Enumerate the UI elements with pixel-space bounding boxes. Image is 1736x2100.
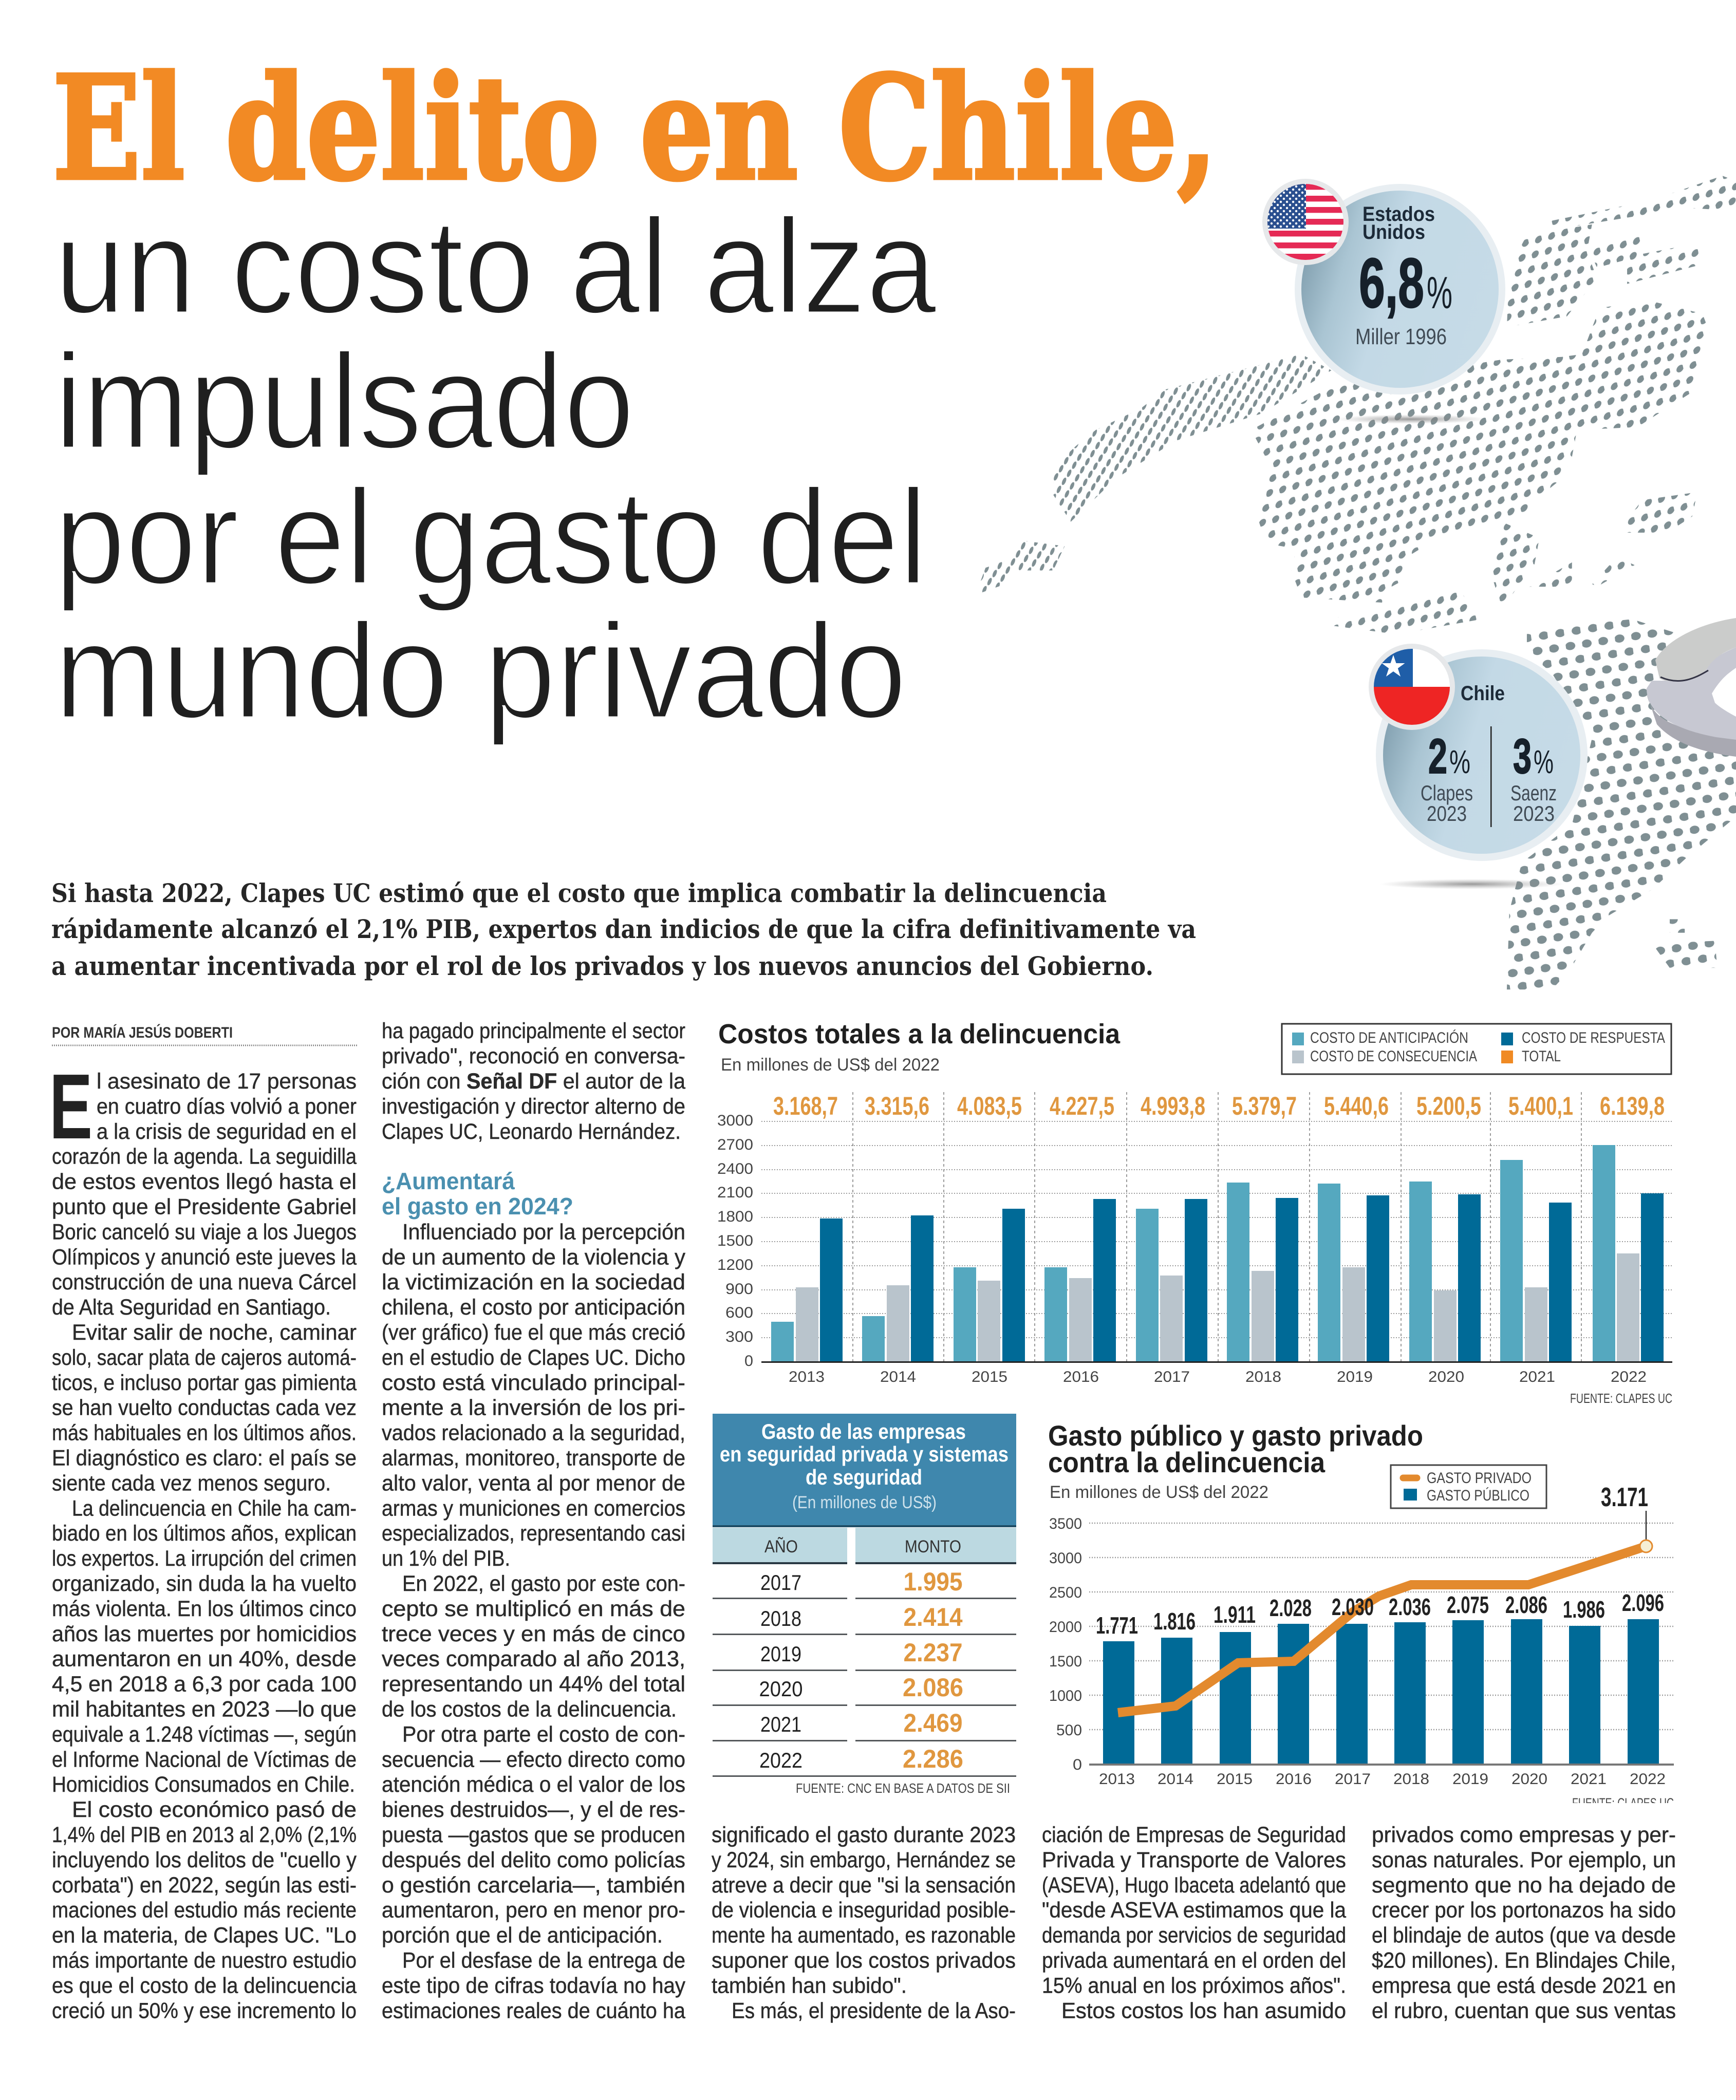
article column 3: y 2024, sin embargo, Hernández se	[712, 1848, 1016, 1872]
value: 3% Saenz 2023: %	[1534, 743, 1554, 780]
article column 2	[382, 1019, 685, 2023]
x axis years: 2013	[1099, 1771, 1135, 1788]
table rows: 2020	[759, 1677, 802, 1701]
column text: alto valor, venta al por menor de	[382, 1471, 685, 1495]
column text: o gestión carcelaria—, también	[382, 1873, 685, 1898]
bar value labels: 2.096	[1622, 1589, 1664, 1616]
table rows: 2019	[760, 1642, 801, 1666]
y axis labels: 0	[744, 1353, 753, 1370]
x axis years: 2017	[1335, 1771, 1371, 1788]
source: FUENTE: CLAPES UC	[1570, 1391, 1672, 1406]
bar value labels	[1096, 1589, 1664, 1639]
paragraph continuation: ha pagado principalmente el sector	[382, 1019, 685, 1043]
x axis years: 2022	[1611, 1368, 1647, 1385]
article column 5: sonas naturales. Por ejemplo, un	[1372, 1848, 1676, 1872]
column text: en cuatro días volvió a poner	[97, 1094, 357, 1119]
column text: aumentaron, pero en menor pro-	[382, 1898, 685, 1923]
paragraph continuation: Clapes UC, Leonardo Hernández.	[382, 1119, 681, 1144]
x axis years: 2015	[972, 1368, 1007, 1385]
total values: 5.440,6	[1324, 1092, 1389, 1120]
column text: de Alta Seguridad en Santiago.	[52, 1295, 331, 1320]
bar value labels: 2.028	[1270, 1595, 1312, 1621]
table rows: 2.237	[903, 1638, 963, 1667]
column text: Evitar salir de noche, caminar	[72, 1320, 357, 1345]
table rows: 2.414	[903, 1603, 963, 1632]
article column 4: 15% anual en los próximos años".	[1042, 1973, 1346, 1998]
table header	[713, 1414, 1016, 1527]
total values	[773, 1092, 1665, 1120]
byline: POR MARÍA JESÚS DOBERTI	[52, 1024, 233, 1041]
column text: chilena, el costo por anticipación	[382, 1295, 685, 1320]
column text: a la crisis de seguridad en el	[97, 1119, 357, 1144]
column text: l asesinato de 17 personas	[97, 1069, 357, 1094]
value: 6,8%: %	[1427, 267, 1452, 318]
y axis labels	[1049, 1515, 1082, 1773]
drop cap: E	[49, 1055, 92, 1158]
column text: El costo económico pasó de	[72, 1797, 357, 1822]
bubble shadow	[1334, 415, 1488, 424]
column text: En 2022, el gasto por este con-	[402, 1571, 685, 1596]
column text: 4,5 en 2018 a 6,3 por cada 100	[52, 1672, 357, 1697]
x axis years: 2019	[1337, 1368, 1373, 1385]
article column 4: privada aumentará en el orden del	[1042, 1948, 1346, 1973]
y axis labels: 2700	[717, 1136, 753, 1153]
x axis years: 2013	[789, 1368, 825, 1385]
article column 3: atreve a decir que "si la sensación	[712, 1873, 1016, 1898]
x axis years: 2017	[1154, 1368, 1190, 1385]
column text: es que el costo de la delincuencia	[52, 1973, 357, 1998]
column text: armas y municiones en comercios	[382, 1496, 685, 1521]
dotted world map	[976, 176, 1736, 989]
chart heading: Costos totales a la delincuencia	[718, 1019, 1121, 1049]
y axis labels: 1000	[1049, 1688, 1082, 1704]
y axis labels: 900	[725, 1281, 753, 1298]
chart heading: En millones de US$ del 2022	[1050, 1483, 1268, 1502]
y axis labels	[717, 1112, 753, 1370]
column text: los expertos. La irrupción del crimen	[52, 1546, 357, 1571]
column text: se han vuelto conductas cada vez	[52, 1396, 357, 1420]
bar value labels: 1.911	[1214, 1601, 1256, 1628]
map: south america	[1507, 619, 1736, 989]
column text: solo, sacar plata de cajeros automá-	[52, 1345, 357, 1370]
column text: representando un 44% del total	[382, 1672, 685, 1697]
chart heading: contra la delincuencia	[1048, 1446, 1326, 1478]
paragraph continuation: privado", reconoció en conversa-	[382, 1044, 685, 1068]
paragraph continuation: ción con Señal DF el autor de la	[382, 1069, 685, 1094]
value: 2% Clapes 2023: Clapes	[1421, 781, 1473, 805]
column text: secuencia — efecto directo como	[382, 1747, 685, 1772]
article column 3: también han subido".	[712, 1973, 907, 1998]
y axis labels: 2500	[1049, 1584, 1082, 1601]
value: 6,8%: 6,8	[1359, 244, 1424, 323]
total values: 5.200,5	[1416, 1092, 1481, 1120]
article column 3: Es más, el presidente de la Aso-	[732, 1998, 1016, 2023]
table header: de seguridad	[806, 1465, 922, 1489]
table rows: 1.995	[903, 1567, 963, 1596]
column text: la victimización en la sociedad	[382, 1270, 685, 1295]
table rows: 2.086	[903, 1673, 963, 1702]
article column 4: "desde ASEVA estimamos que la	[1042, 1898, 1346, 1923]
article column 4	[1042, 1823, 1346, 2023]
article column 4: Privada y Transporte de Valores	[1042, 1848, 1346, 1872]
map: main land mass	[1251, 300, 1710, 603]
title: dark lines: por el gasto del	[54, 461, 927, 613]
callout: Estados Unidos bubble	[1262, 179, 1505, 424]
column text: construcción de una nueva Cárcel	[52, 1270, 357, 1295]
column text: punto que el Presidente Gabriel	[52, 1195, 357, 1220]
paragraph continuation	[382, 1019, 685, 1144]
table header: en seguridad privada y sistemas	[720, 1442, 1009, 1466]
x axis years: 2016	[1063, 1368, 1099, 1385]
column text: alarmas, monitoreo, transporte de	[382, 1446, 685, 1470]
title: dark lines: impulsado	[54, 326, 634, 478]
value: 3% Saenz 2023: Saenz	[1510, 781, 1557, 805]
article column 3: significado el gasto durante 2023	[712, 1823, 1016, 1847]
bars: consecuencia	[796, 1253, 1639, 1362]
standfirst: rápidamente alcanzó el 2,1% PIB, expertos dan indicios de que la cifra definitivamente va	[51, 914, 1196, 944]
total values: 4.083,5	[957, 1092, 1022, 1120]
column text: vados relacionado a la seguridad,	[382, 1421, 685, 1446]
column headers	[713, 1528, 1016, 1564]
label: Estados Unidos	[1362, 203, 1435, 243]
standfirst: a aumentar incentivada por el rol de los privados y los nuevos anuncios del Gobierno.	[51, 951, 1153, 981]
source: Miller 1996: Miller 1996	[1355, 324, 1447, 349]
title: orange line: El delito en Chile,	[52, 44, 1218, 212]
article column 5	[1372, 1823, 1676, 2023]
legend: COSTO DE CONSECUENCIA	[1310, 1048, 1477, 1065]
article column 1	[49, 1055, 357, 2023]
column headers: MONTO	[905, 1537, 961, 1557]
map: southern islands	[1652, 919, 1718, 968]
subheading: el gasto en 2024?	[382, 1193, 573, 1220]
column text: trece veces y en más de cinco	[382, 1622, 685, 1646]
article column 3: de violencia e inseguridad posible-	[712, 1898, 1016, 1923]
legend	[1391, 1465, 1546, 1508]
total values: 4.227,5	[1050, 1092, 1114, 1120]
callout: Chile bubble	[1369, 644, 1588, 889]
column text: siente cada vez menos seguro.	[52, 1471, 331, 1495]
bar value labels: 1.986	[1563, 1596, 1605, 1623]
legend: TOTAL	[1522, 1048, 1561, 1065]
subheading	[382, 1168, 573, 1220]
article column 5: el rubro, cuentan que sus ventas	[1372, 1998, 1676, 2023]
column text: el Informe Nacional de Víctimas de	[52, 1747, 357, 1772]
x axis years: 2019	[1452, 1771, 1488, 1788]
total values: 3.168,7	[773, 1092, 838, 1120]
bubble disc	[1376, 649, 1588, 861]
column text: porción que el de anticipación.	[382, 1923, 663, 1948]
column text: 1,4% del PIB en 2013 al 2,0% (2,1%	[52, 1823, 357, 1847]
y axis labels: 0	[1073, 1756, 1082, 1773]
column text	[382, 1220, 685, 2023]
article column 5: el blindaje de autos (que va desde	[1372, 1923, 1676, 1948]
value: 2% Clapes 2023: 2023	[1427, 801, 1467, 826]
label: Chile: Chile	[1461, 682, 1505, 705]
y axis labels: 500	[1056, 1722, 1082, 1739]
chart heading: En millones de US$ del 2022	[721, 1055, 940, 1075]
legend: COSTO DE ANTICIPACIÓN	[1310, 1029, 1468, 1046]
column text: Por el desfase de la entrega de	[402, 1948, 685, 1973]
callout: 3.171	[1601, 1483, 1652, 1552]
column text: un 1% del PIB.	[382, 1546, 510, 1571]
subheading: ¿Aumentará	[382, 1168, 515, 1194]
column text: El diagnóstico es claro: el país se	[52, 1446, 357, 1470]
x axis years	[789, 1368, 1647, 1385]
x axis years: 2016	[1276, 1771, 1312, 1788]
y axis labels: 1500	[717, 1232, 753, 1249]
bar value labels: 2.086	[1505, 1591, 1547, 1618]
article column 4: Estos costos los han asumido	[1061, 1998, 1346, 2023]
divider	[1490, 726, 1492, 827]
y axis labels: 1800	[717, 1208, 753, 1225]
bar value labels: 1.816	[1153, 1608, 1196, 1635]
x axis years	[1099, 1771, 1666, 1788]
table header: (En millones de US$)	[792, 1493, 937, 1512]
table header: Gasto de las empresas	[761, 1419, 966, 1443]
article column 5: empresa que está desde 2021 en	[1372, 1973, 1676, 1998]
icon: Chile flag	[1369, 644, 1455, 730]
total values: 4.993,8	[1141, 1092, 1205, 1120]
bar value labels: 2.075	[1447, 1591, 1489, 1618]
total values: 6.139,8	[1600, 1092, 1665, 1120]
article column 4: ciación de Empresas de Seguridad	[1042, 1823, 1346, 1847]
bar value labels: 2.030	[1332, 1593, 1374, 1620]
y axis labels: 3000	[717, 1112, 753, 1129]
column text: más importante de nuestro estudio	[52, 1948, 357, 1973]
column text: ticos, e incluso portar gas pimienta	[52, 1371, 357, 1395]
column text: de un aumento de la violencia y	[382, 1245, 685, 1269]
x axis years: 2020	[1428, 1368, 1464, 1385]
y axis labels: 3000	[1049, 1550, 1082, 1567]
legend: COSTO DE RESPUESTA	[1522, 1029, 1665, 1046]
x axis years: 2014	[880, 1368, 916, 1385]
column text: más violenta. En los últimos cinco	[52, 1597, 357, 1621]
title: dark lines: un costo al alza	[54, 191, 938, 342]
column text: puesta —gastos que se producen	[382, 1823, 685, 1847]
y axis labels: 300	[725, 1328, 753, 1345]
table rows: 2.286	[903, 1745, 963, 1773]
callout: 3.171: 3.171	[1601, 1483, 1648, 1512]
value: 2% Clapes 2023: %	[1449, 743, 1470, 780]
chart heading: Gasto público y gasto privado	[1048, 1419, 1423, 1452]
column text: Homicidios Consumados en Chile.	[52, 1772, 355, 1797]
standfirst	[51, 878, 1196, 981]
column text: en la materia, de Clapes UC. "Lo	[52, 1923, 357, 1948]
column text: costo está vinculado principal-	[382, 1371, 685, 1395]
bar value labels: 1.771	[1096, 1612, 1138, 1639]
total values: 5.400,1	[1508, 1092, 1573, 1120]
legend: GASTO PÚBLICO	[1427, 1487, 1529, 1504]
chart heading	[718, 1019, 1121, 1075]
map: caribbean islands	[1492, 492, 1697, 608]
column text: mente a la inversión de los pri-	[382, 1396, 685, 1420]
article column 4: demanda por servicios de seguridad	[1042, 1923, 1346, 1948]
map: pacific islands	[976, 541, 1065, 595]
column text: más habituales en los últimos años.	[52, 1421, 357, 1446]
x axis years: 2021	[1571, 1771, 1607, 1788]
title: dark lines: mundo privado	[54, 595, 907, 747]
x axis years: 2015	[1217, 1771, 1253, 1788]
article column 5: privados como empresas y per-	[1372, 1823, 1676, 1847]
total values: 5.379,7	[1232, 1092, 1297, 1120]
column text: Boric canceló su viaje a los Juegos	[52, 1220, 357, 1244]
table rows	[713, 1567, 1016, 1777]
table rows: 2022	[759, 1748, 802, 1772]
chart heading	[1048, 1419, 1423, 1502]
icon: handcuffs	[1647, 618, 1736, 757]
icon: US flag	[1262, 179, 1349, 265]
y axis labels: 3500	[1049, 1515, 1082, 1532]
standfirst: Si hasta 2022, Clapes UC estimó que el costo que implica combatir la delincuencia	[51, 878, 1107, 908]
column headers: AÑO	[764, 1537, 798, 1557]
article column 5: crecer por los portonazos ha sido	[1372, 1898, 1676, 1923]
column text: corbata") en 2022, según las esti-	[52, 1873, 357, 1898]
panel: gasto público y privado chart	[1048, 1419, 1674, 1811]
total values: 3.315,6	[865, 1092, 929, 1120]
column text: La delincuencia en Chile ha cam-	[72, 1496, 357, 1521]
x axis years: 2021	[1519, 1368, 1555, 1385]
column text: veces comparado al año 2013,	[382, 1647, 685, 1672]
column text: organizado, sin duda la ha vuelto	[52, 1571, 357, 1596]
title	[52, 44, 1218, 747]
column text: Por otra parte el costo de con-	[402, 1722, 685, 1747]
legend	[1282, 1024, 1671, 1074]
column text: en el estudio de Clapes UC. Dicho	[382, 1345, 685, 1370]
column text: atención médica o el valor de los	[382, 1772, 685, 1797]
column text: aumentaron en un 40%, desde	[52, 1647, 357, 1672]
article column 3: suponer que los costos privados	[712, 1948, 1016, 1973]
x axis years: 2022	[1630, 1771, 1666, 1788]
bubble shadow	[1379, 879, 1564, 889]
column text: (ver gráfico) fue el que más creció	[382, 1320, 685, 1345]
column text: de los costos de la delincuencia.	[382, 1697, 677, 1722]
value: 3% Saenz 2023	[1510, 729, 1557, 826]
column text: mil habitantes en 2023 —lo que	[52, 1697, 357, 1722]
column text: especializados, representando casi	[382, 1521, 685, 1546]
column text: creció un 50% y ese incremento lo	[52, 1998, 357, 2023]
source: FUENTE: CNC EN BASE A DATOS DE SII	[796, 1780, 1010, 1796]
y axis labels: 2000	[1049, 1619, 1082, 1636]
column text: años las muertes por homicidios	[52, 1622, 357, 1646]
x axis years: 2018	[1393, 1771, 1429, 1788]
x axis years: 2014	[1158, 1771, 1193, 1788]
column text: cepto se multiplicó en más de	[382, 1597, 685, 1621]
table rows: 2021	[760, 1712, 801, 1736]
column text: equivale a 1.248 víctimas —, según	[52, 1722, 357, 1747]
column text: biado en los últimos años, explican	[52, 1521, 357, 1546]
column text	[52, 1069, 357, 2023]
column text: corazón de la agenda. La seguidilla	[52, 1145, 357, 1169]
bar value labels: 2.036	[1389, 1593, 1431, 1620]
map: north america arm	[1053, 354, 1331, 522]
value: 2% Clapes 2023	[1421, 729, 1473, 826]
bubble disc	[1295, 184, 1505, 395]
y axis labels: 1500	[1049, 1653, 1082, 1670]
value: 3% Saenz 2023: 3	[1513, 729, 1532, 784]
bars: gasto público	[1103, 1619, 1659, 1764]
article column 3: mente ha aumentado, es razonable	[712, 1923, 1016, 1948]
column text: estimaciones reales de cuánto ha	[382, 1998, 685, 2023]
article column 4: (ASEVA), Hugo Ibaceta adelantó que	[1042, 1873, 1346, 1898]
y axis labels: 2100	[717, 1184, 753, 1201]
column text: Olímpicos y anunció este jueves la	[52, 1245, 357, 1269]
column text: de estos eventos llegó hasta el	[52, 1170, 357, 1194]
bars: respuesta	[820, 1193, 1664, 1362]
x axis years: 2018	[1245, 1368, 1281, 1385]
column text: bienes destruidos—, y el de res-	[382, 1797, 685, 1822]
title: dark lines	[54, 191, 938, 747]
label: Estados Unidos: Estados	[1362, 203, 1435, 226]
article column 5: segmento que no ha dejado de	[1372, 1873, 1676, 1898]
legend: GASTO PRIVADO	[1427, 1470, 1532, 1487]
x axis years: 2020	[1511, 1771, 1547, 1788]
table rows: 2.469	[903, 1709, 963, 1737]
table rows: 2017	[760, 1570, 801, 1595]
column text: incluyendo los delitos de "cuello y	[52, 1848, 357, 1872]
label: Estados Unidos: Unidos	[1362, 221, 1425, 243]
panel: costos totales chart	[717, 1019, 1672, 1406]
column text: maciones del estudio más reciente	[52, 1898, 357, 1923]
y axis labels: 2400	[717, 1160, 753, 1177]
column text: este tipo de cifras todavía no hay	[382, 1973, 685, 1998]
bars: anticipación	[771, 1145, 1615, 1362]
article column 3	[712, 1823, 1016, 2023]
panel: gasto de las empresas table	[713, 1414, 1016, 1796]
table rows: 2018	[760, 1606, 801, 1630]
map: central america	[1329, 587, 1482, 634]
column text: Influenciado por la percepción	[402, 1220, 685, 1244]
value: 3% Saenz 2023: 2023	[1513, 801, 1555, 826]
map: north	[1507, 176, 1736, 327]
article column 5: $20 millones). En Blindajes Chile,	[1372, 1948, 1676, 1973]
y axis labels: 600	[725, 1304, 753, 1321]
y axis labels: 1200	[717, 1257, 753, 1273]
value: 2% Clapes 2023: 2	[1428, 729, 1447, 784]
paragraph continuation: investigación y director alterno de	[382, 1094, 685, 1119]
column text: después del delito como policías	[382, 1848, 685, 1872]
source (cropped): FUENTE: CLAPES UC	[1572, 1795, 1674, 1811]
line: gasto privado	[1118, 1548, 1641, 1713]
